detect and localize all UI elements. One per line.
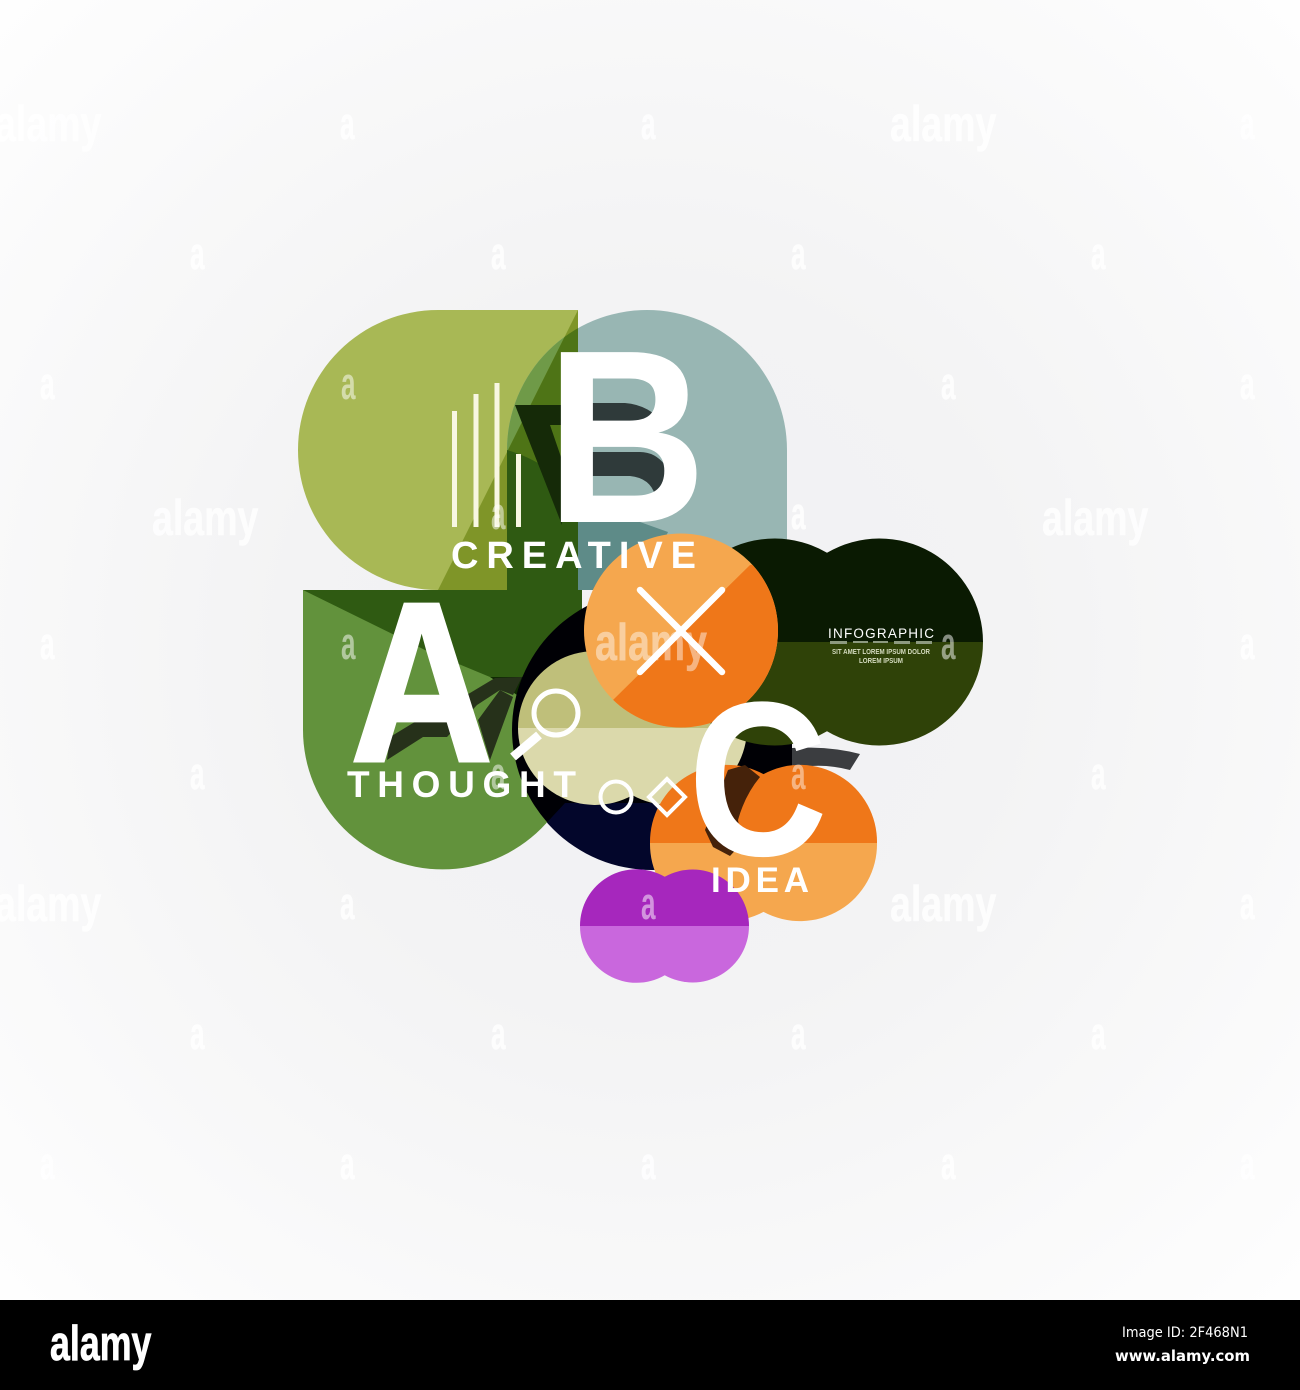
panel: A thought xyxy=(303,590,582,869)
watermark pattern: a xyxy=(1091,229,1106,279)
khaki lobes bottom xyxy=(518,728,747,805)
watermark pattern: a xyxy=(40,359,55,409)
dark green block xyxy=(507,450,578,590)
panel: B creative xyxy=(298,310,787,590)
watermark pattern: a xyxy=(190,1009,205,1059)
watermark pattern: a xyxy=(340,99,355,149)
navy lower part xyxy=(547,803,660,870)
icon: magnifier xyxy=(513,691,578,757)
orange top half xyxy=(650,765,877,843)
watermark pattern: a xyxy=(791,489,806,539)
infographic caption: SIT AMET LOREM IPSUM DOLOR xyxy=(832,649,930,656)
watermark pattern xyxy=(0,97,1255,1189)
title dashes xyxy=(830,641,932,644)
watermark a: a xyxy=(941,619,956,669)
watermark pattern: a xyxy=(491,1009,506,1059)
orange bottom half xyxy=(650,843,877,921)
infographic title: INFOGRAPHIC xyxy=(828,626,934,641)
image id: Image ID: 2F468N1 xyxy=(1122,1325,1248,1341)
panel: dark circle with khaki xyxy=(512,590,860,875)
watermark pattern: a xyxy=(40,619,55,669)
dark chevron shadow xyxy=(515,405,600,525)
footer logo: alamy xyxy=(50,1317,151,1371)
purple top half xyxy=(580,869,749,926)
on-shape watermarks xyxy=(341,359,506,799)
green shield xyxy=(303,590,582,869)
watermark pattern: a xyxy=(340,879,355,929)
overlap green xyxy=(507,337,564,450)
label THOUGHT: THOUGHT xyxy=(347,764,576,805)
watermark pattern: a xyxy=(190,229,205,279)
watermark pattern: a xyxy=(641,99,656,149)
watermark pattern: a xyxy=(1240,359,1255,409)
darker wedge xyxy=(490,677,525,697)
watermark pattern: alamy xyxy=(890,877,997,932)
purple bottom half xyxy=(580,926,749,983)
on-shape watermarks: a xyxy=(491,489,506,539)
watermark pattern: alamy xyxy=(1042,491,1149,546)
brown overlap xyxy=(705,765,760,856)
B counter shadows xyxy=(570,403,665,495)
label CREATIVE: CREATIVE xyxy=(451,535,696,577)
on-shape watermarks: a xyxy=(491,749,506,799)
vertical bar lines xyxy=(452,383,521,527)
black circle xyxy=(512,590,792,869)
watermark pattern: a xyxy=(1091,749,1106,799)
icon: X mark xyxy=(640,590,722,672)
khaki lobes top xyxy=(518,651,747,728)
on-shape watermarks: a xyxy=(341,619,356,669)
letter B: B xyxy=(546,298,707,575)
panel: purple double circle xyxy=(580,869,749,983)
olive triangle xyxy=(438,310,578,590)
dark top half xyxy=(671,538,983,642)
dark green triangle xyxy=(303,590,582,690)
watermark pattern: a xyxy=(190,749,205,799)
icon: diamond xyxy=(649,779,685,815)
light green teardrop xyxy=(298,310,578,590)
panel: orange idea double circle xyxy=(650,749,877,921)
gray arc xyxy=(792,748,860,770)
mid green overlap xyxy=(508,328,578,463)
watermark pattern: a xyxy=(1240,1139,1255,1189)
website: www.alamy.com xyxy=(1115,1347,1250,1365)
teal lower band xyxy=(578,522,668,590)
on-shape watermarks: a xyxy=(341,359,356,409)
watermark pattern: a xyxy=(1240,619,1255,669)
letter C: C xyxy=(688,655,828,902)
watermark a: a xyxy=(641,879,656,929)
watermark pattern: a xyxy=(791,1009,806,1059)
panel: orange X circle xyxy=(584,534,778,728)
icon: small circle xyxy=(600,782,632,812)
arrow shadow xyxy=(387,677,522,760)
watermark pattern: a xyxy=(491,229,506,279)
footer bar xyxy=(0,1300,1300,1390)
watermark pattern: a xyxy=(40,1139,55,1189)
watermark pattern: a xyxy=(941,1139,956,1189)
watermark pattern: a xyxy=(791,229,806,279)
label IDEA: IDEA xyxy=(711,861,809,900)
light orange disc xyxy=(584,534,778,728)
watermark on circle: alamy xyxy=(595,613,707,671)
blue teardrop xyxy=(507,310,787,590)
watermark pattern: a xyxy=(641,1139,656,1189)
watermark pattern: a xyxy=(1091,1009,1106,1059)
watermark a: a xyxy=(791,749,806,799)
olive bottom half xyxy=(671,642,983,746)
watermark pattern: a xyxy=(1240,99,1255,149)
watermark pattern: a xyxy=(1240,879,1255,929)
watermark pattern: alamy xyxy=(152,491,259,546)
letter A: A xyxy=(350,556,493,810)
watermark pattern: alamy xyxy=(890,97,997,152)
panel: infographic dark double circle xyxy=(671,538,983,746)
infographic caption line 2: LOREM IPSUM xyxy=(859,658,903,665)
dark orange half xyxy=(613,564,778,728)
watermark pattern: a xyxy=(941,359,956,409)
watermark pattern: a xyxy=(340,1139,355,1189)
